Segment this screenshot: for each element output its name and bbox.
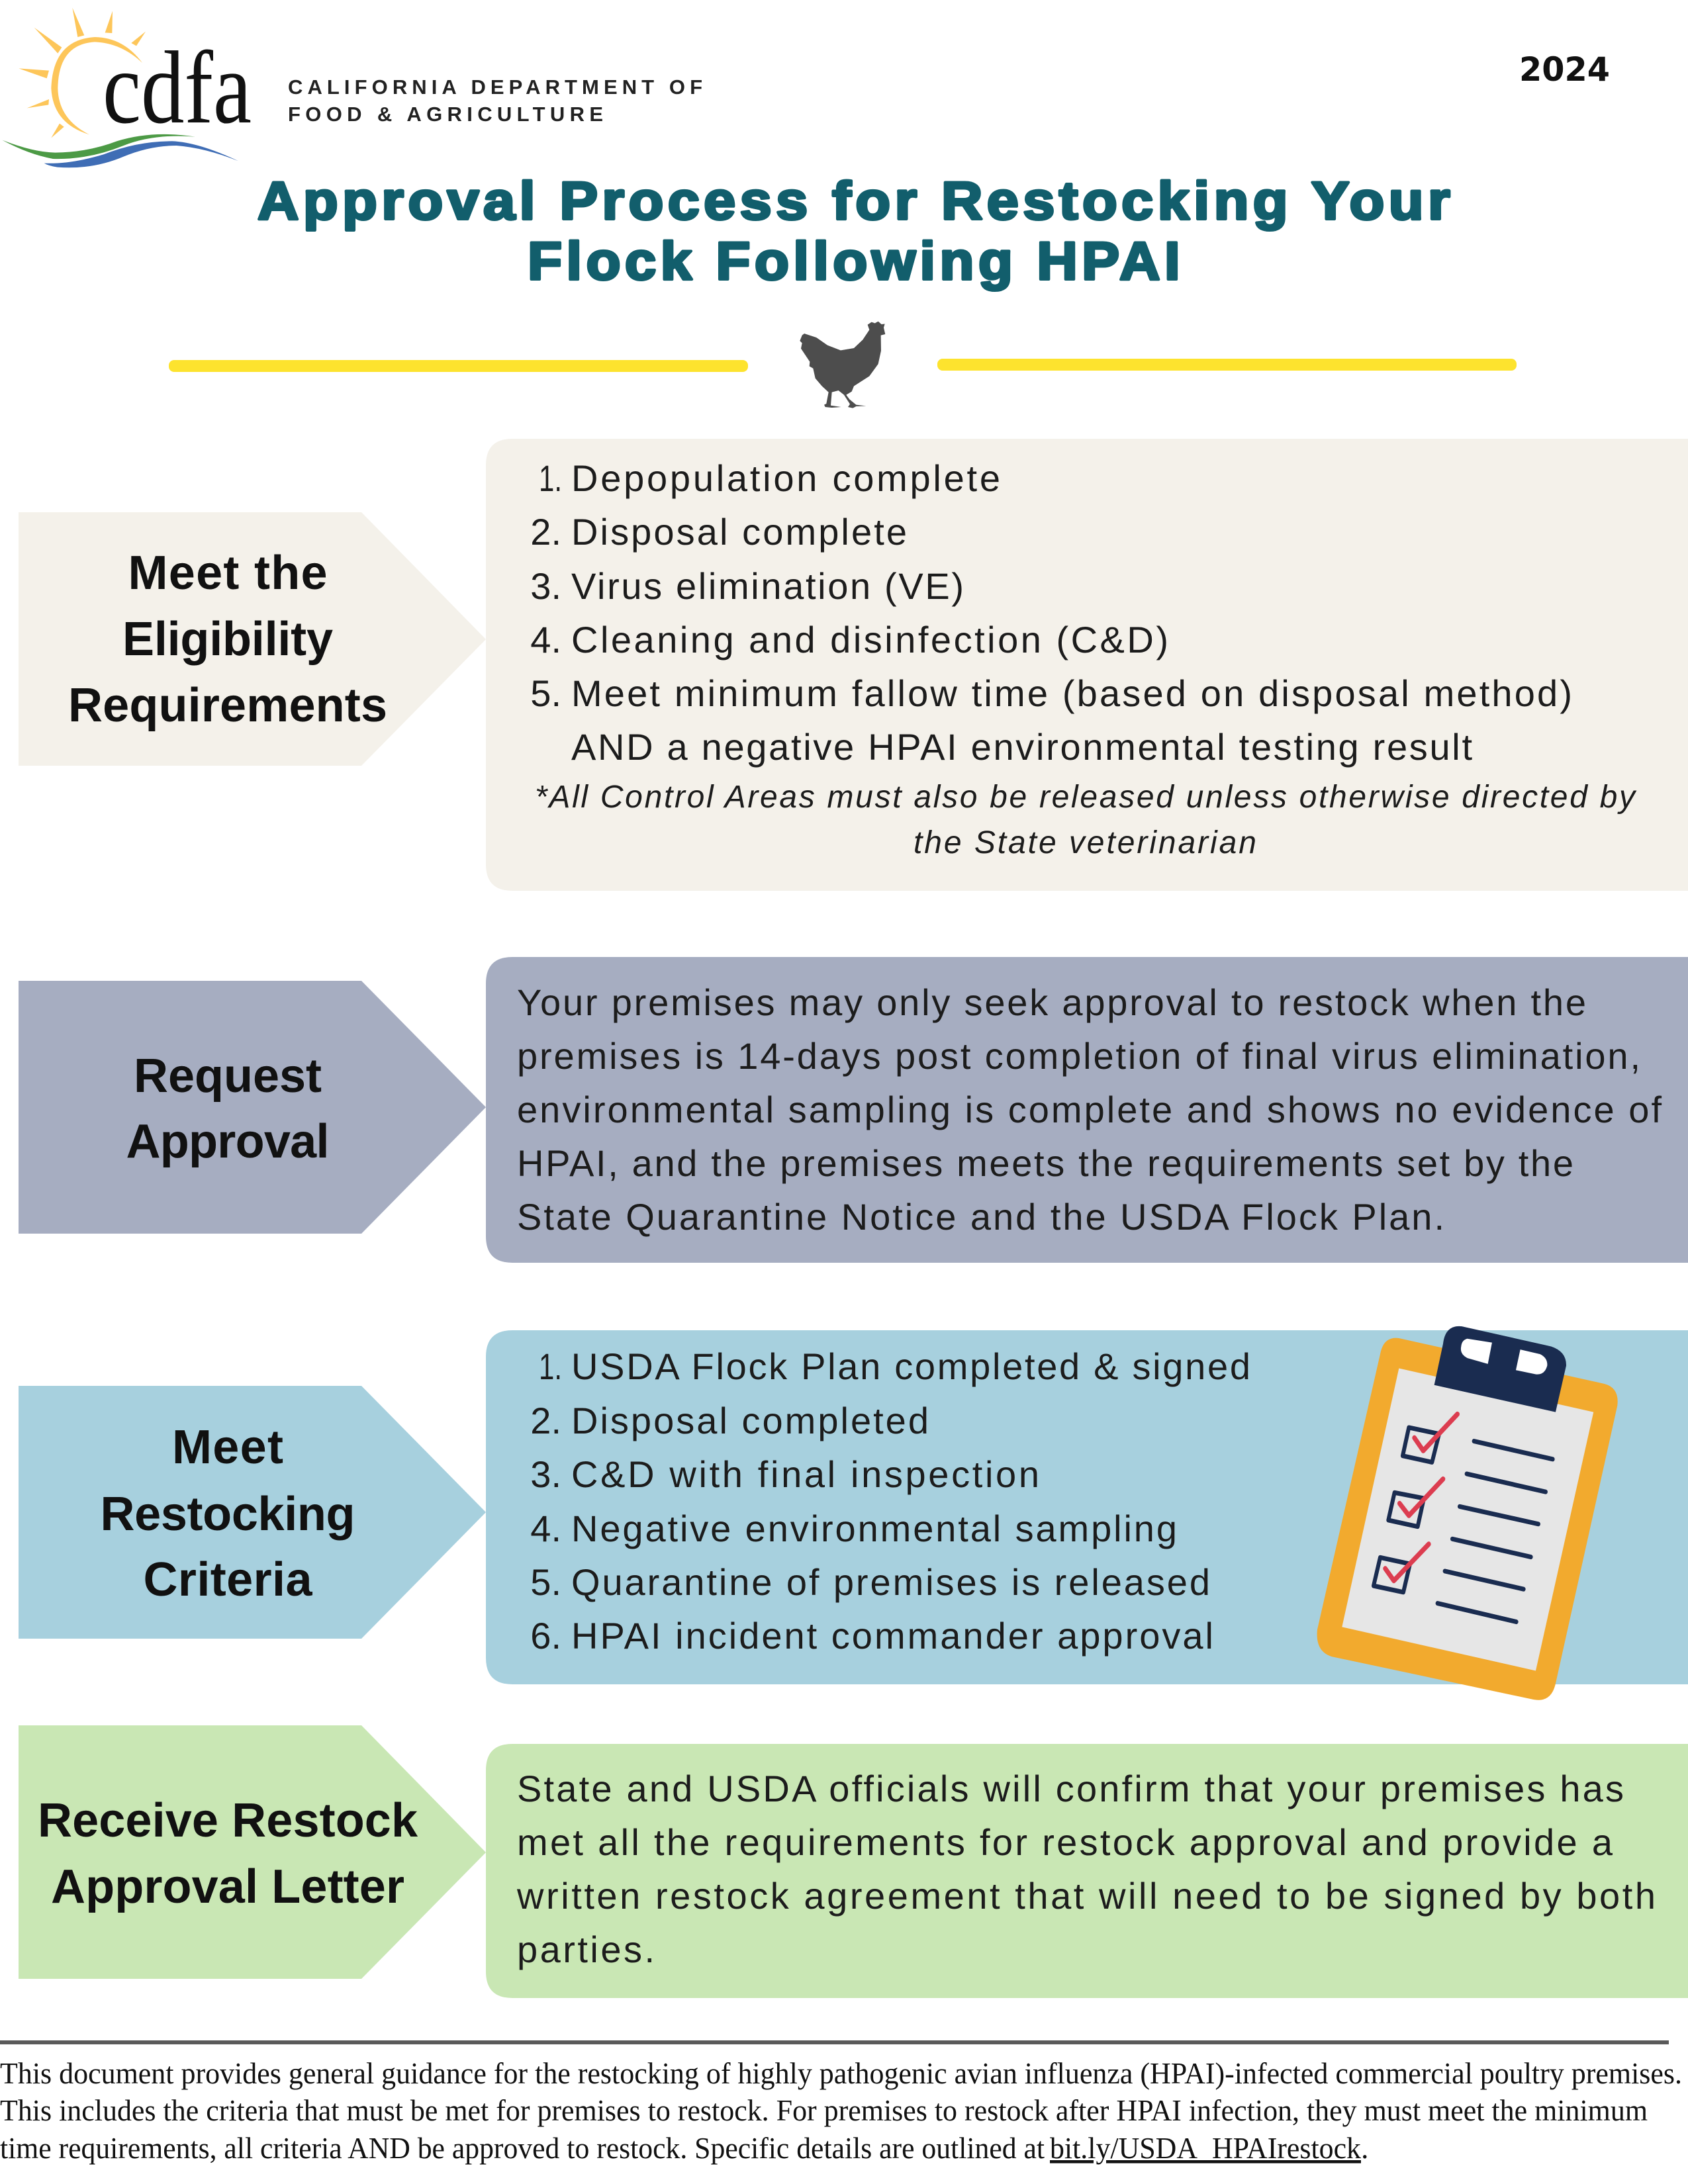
panel: restocking criteria: Disposal completed [571, 1400, 929, 1441]
icon: clipboard checklist [1317, 1326, 1618, 1700]
panel: eligibility requirements: 5. [530, 672, 561, 714]
panel: request approval: environmental sampling is complete and shows no evidence of [517, 1089, 1662, 1130]
step arrow: Meet the Eligibility Requirements: Eligibility [122, 613, 333, 666]
panel: eligibility requirements: *All Control Areas must also be released unless otherwise directed by [535, 780, 1637, 815]
panel: restocking criteria: C&D with final inspection [571, 1453, 1039, 1495]
panel: request approval: premises is 14-days post completion of final virus elimination, [517, 1035, 1640, 1077]
panel: approval letter [486, 1744, 1688, 1998]
panel: eligibility requirements [486, 439, 1688, 891]
panel: restocking criteria: USDA Flock Plan completed & signed [571, 1345, 1250, 1387]
logo: CDFA: cdfa [103, 30, 252, 145]
step arrow: Receive Restock Approval Letter: Receive Restock [38, 1794, 418, 1847]
footer text [0, 2056, 1682, 2165]
panel: restocking criteria [486, 1330, 1688, 1684]
panel: eligibility requirements: Meet minimum fallow time (based on disposal method) [571, 672, 1572, 714]
footer rule [0, 2040, 1669, 2044]
panel: approval letter: parties. [517, 1929, 655, 1970]
panel: eligibility requirements: Virus elimination (VE) [571, 565, 964, 607]
panel: eligibility requirements: 2. [530, 511, 561, 553]
panel: eligibility requirements: Depopulation complete [571, 457, 1000, 499]
step arrow: Receive Restock Approval Letter: Approval Letter [51, 1860, 404, 1913]
panel: restocking criteria: 6. [530, 1615, 561, 1657]
panel: approval letter: State and USDA officials will confirm that your premises has [517, 1768, 1624, 1809]
panel: eligibility requirements: 3. [530, 565, 561, 607]
title: Approval Process for Restocking Your [258, 171, 1454, 231]
step arrow: Meet the Eligibility Requirements [19, 512, 486, 766]
divider: yellow stroke left [169, 360, 748, 372]
step arrow: Request Approval: Approval [126, 1115, 330, 1168]
divider: yellow stroke right [937, 359, 1517, 371]
step arrow: Receive Restock Approval Letter [19, 1725, 486, 1979]
step arrow: Request Approval: Request [134, 1050, 322, 1103]
panel: restocking criteria: 2. [530, 1400, 561, 1441]
footer text: . [1361, 2131, 1369, 2165]
logo: CDFA [2, 8, 702, 167]
panel: restocking criteria: Quarantine of premises is released [571, 1561, 1210, 1603]
panel: restocking criteria: 3. [530, 1453, 561, 1495]
panel: request approval [486, 957, 1688, 1263]
panel: eligibility requirements: 1. [539, 457, 562, 499]
panel: request approval: HPAI, and the premises meets the requirements set by the [517, 1142, 1573, 1184]
panel: eligibility requirements: 4. [530, 619, 561, 660]
step arrow: Meet the Eligibility Requirements: Meet the [128, 547, 327, 600]
panel: restocking criteria: 5. [530, 1561, 561, 1603]
logo: CDFA: FOOD & AGRICULTURE [288, 103, 603, 126]
step arrow: Meet Restocking Criteria: Meet [172, 1421, 283, 1474]
step arrow: Request Approval [19, 981, 486, 1234]
panel: eligibility requirements: Disposal complete [571, 511, 907, 553]
panel: approval letter: met all the requirements for restock approval and provide a [517, 1821, 1613, 1863]
icon: chicken [800, 322, 885, 408]
panel: approval letter: written restock agreement that will need to be signed by both [516, 1875, 1656, 1917]
panel: request approval: Your premises may only seek approval to restock when the [517, 981, 1586, 1023]
panel: restocking criteria: Negative environmental sampling [571, 1508, 1177, 1549]
panel: request approval: State Quarantine Notice and the USDA Flock Plan. [517, 1196, 1444, 1238]
title [258, 171, 1454, 291]
footer text: bit.ly/USDA_HPAIrestock [1050, 2131, 1361, 2165]
panel: restocking criteria: 1. [539, 1345, 562, 1387]
panel: restocking criteria: HPAI incident commander approval [571, 1615, 1213, 1657]
step arrow: Meet Restocking Criteria: Restocking [101, 1488, 355, 1541]
step arrow: Meet Restocking Criteria: Criteria [143, 1553, 312, 1606]
logo: CDFA: CALIFORNIA DEPARTMENT OF [288, 75, 702, 99]
panel: eligibility requirements: Cleaning and disinfection (C&D) [571, 619, 1168, 660]
panel: eligibility requirements: the State veterinarian [914, 825, 1256, 860]
footer text: This includes the criteria that must be met for premises to restock. For premises to restock after HPAI infection, they must meet the minimum [0, 2093, 1648, 2127]
title: Flock Following HPAI [528, 232, 1184, 291]
panel: restocking criteria: 4. [530, 1508, 561, 1549]
year: 2024 [1519, 50, 1610, 89]
footer text: time requirements, all criteria AND be approved to restock. Specific details are outlined at [0, 2131, 1045, 2165]
step arrow: Meet the Eligibility Requirements: Requirements [68, 679, 387, 732]
panel: eligibility requirements: AND a negative HPAI environmental testing result [571, 726, 1472, 768]
step arrow: Meet Restocking Criteria [19, 1386, 486, 1639]
